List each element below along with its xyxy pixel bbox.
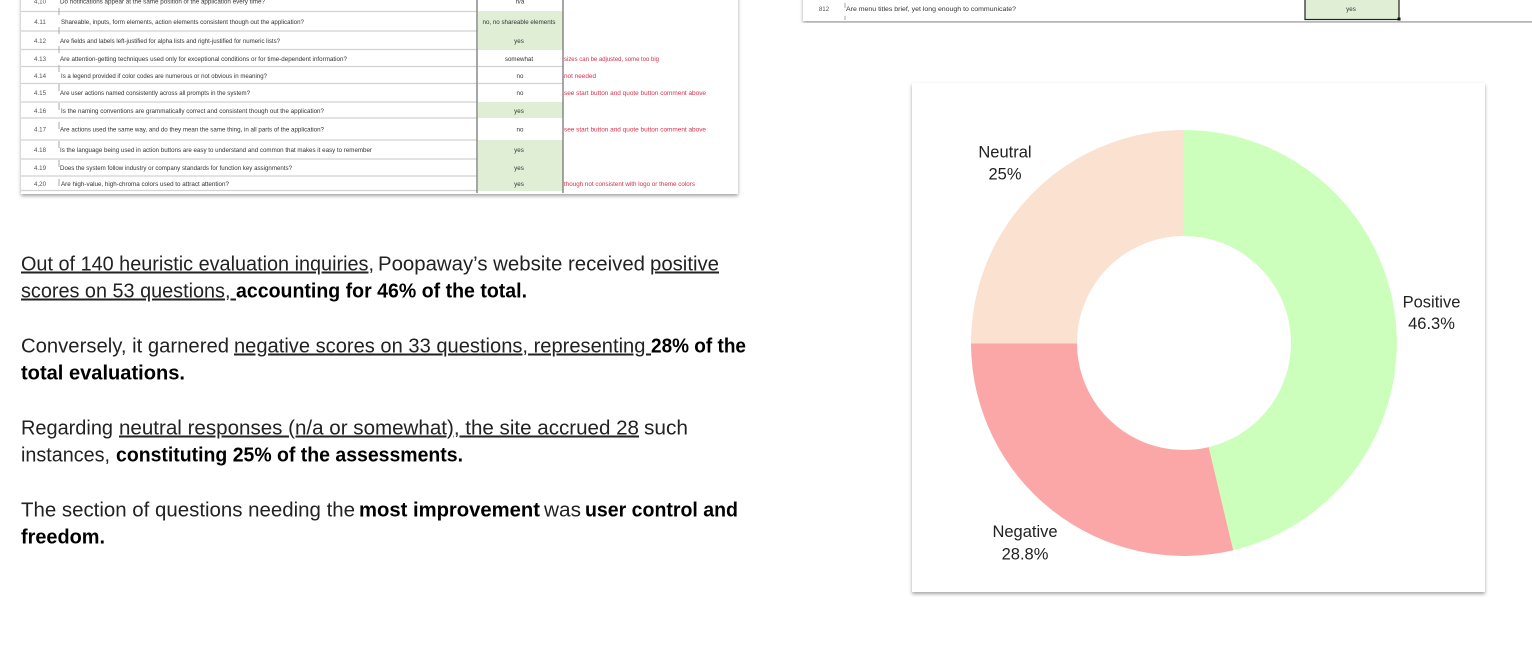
table rows: not needed <box>564 73 597 80</box>
table rows: yes <box>514 181 524 188</box>
label: negative: Negative <box>992 523 1058 541</box>
paragraph: positive scores <box>21 254 719 302</box>
panel: donut chart card <box>912 83 1485 592</box>
table rows: sizes can be adjusted, some too big <box>564 56 660 63</box>
label: positive: Positive <box>1403 294 1460 312</box>
paragraph: neutral responses: constituting 25% of the assessments. <box>116 444 463 466</box>
paragraph: most improvement: most improvement <box>359 500 540 522</box>
table rows: Are user actions named consistently across all prompts in the system? <box>60 90 250 97</box>
table rows: no, no shareable elements <box>483 19 555 26</box>
table rows: Are actions used the same way, and do they mean the same thing, in all parts of the application? <box>60 126 324 134</box>
panel: right evaluation table <box>803 0 1532 21</box>
text block: findings summary <box>21 254 746 548</box>
segment: neutral <box>971 130 1184 344</box>
paragraph: negative scores: 28% of the <box>651 336 746 358</box>
table rows: no <box>517 90 524 97</box>
answer cell <box>1305 0 1399 20</box>
row 8.12: 812 <box>819 6 830 13</box>
table rows: Are attention-getting techniques used only for exceptional conditions or for time-dependent information? <box>60 56 347 63</box>
table answer highlights <box>478 11 563 191</box>
label: positive: 46.3% <box>1408 315 1455 333</box>
paragraph: positive scores: Poopaway’s website received <box>378 254 645 276</box>
paragraph: neutral responses: instances, <box>21 444 110 466</box>
table rows: somewhat <box>505 56 533 63</box>
table rows: see start button and quote button comment above <box>564 90 707 97</box>
paragraph: most improvement: was <box>543 500 581 522</box>
table rows: Are high-value, high-chroma colors used to attract attention? <box>61 181 229 188</box>
row 8.12: Are menu titles brief, yet long enough to communicate? <box>846 6 1016 13</box>
donut chart <box>971 130 1397 556</box>
table column borders <box>477 0 563 193</box>
paragraph: positive scores: positive <box>650 254 719 276</box>
table rows: no <box>517 126 524 134</box>
table rows: yes <box>514 165 524 172</box>
paragraph: neutral responses: such <box>644 418 688 440</box>
table rows: 4.18 <box>34 147 47 154</box>
paragraph: positive scores: scores on 53 questions, <box>21 280 236 302</box>
table rows: yes <box>514 38 524 45</box>
paragraph: neutral responses <box>21 418 688 466</box>
table rows: 4.11 <box>34 19 46 26</box>
paragraph: neutral responses: Regarding <box>21 418 113 440</box>
table rows: yes <box>514 108 524 115</box>
table rows: Are fields and labels left-justified for alpha lists and right-justified for numeric lists? <box>60 38 280 45</box>
segment: negative <box>971 344 1233 556</box>
label: negative: 28.8% <box>1002 546 1049 564</box>
paragraph: neutral responses: neutral responses (n/a or somewhat), the site accrued 28 <box>119 418 639 440</box>
paragraph: most improvement: freedom. <box>21 526 105 548</box>
paragraph: negative scores: negative scores on 33 questions, representing <box>234 336 651 358</box>
table rows <box>34 0 707 188</box>
label: neutral: 25% <box>988 166 1022 184</box>
table rows: yes <box>514 147 524 154</box>
paragraph: most improvement <box>21 500 738 548</box>
paragraph: positive scores: accounting for 46% of the total. <box>236 280 527 302</box>
table rows: 4.16 <box>34 108 47 115</box>
row 8.12: yes <box>1346 6 1356 13</box>
table rows: though not consistent with logo or theme colors <box>564 181 695 188</box>
table rows: Is the naming conventions are grammatically correct and consistent though out the application? <box>61 108 324 115</box>
table rows: 4.17 <box>34 126 47 134</box>
table rows: see start button and quote button comment above <box>564 126 707 134</box>
paragraph: negative scores <box>21 336 746 384</box>
paragraph: negative scores: Conversely, it garnered <box>21 336 229 358</box>
table rows: 4,20 <box>34 181 47 188</box>
table rows: 4.14 <box>34 73 47 80</box>
paragraph: negative scores: total evaluations. <box>21 362 185 384</box>
segment: positive <box>1184 130 1397 550</box>
paragraph: most improvement: The section of questions needing the <box>21 500 355 522</box>
table rows: Is the language being used in action buttons are easy to understand and common that makes it easy to remember <box>60 147 373 154</box>
table rows: 4.15 <box>34 90 47 97</box>
paragraph: most improvement: user control and <box>585 500 738 522</box>
row 8.12 <box>819 6 1356 13</box>
paragraph: positive scores: Out of 140 heuristic evaluation inquiries, <box>21 254 374 276</box>
table rows: no <box>517 73 524 80</box>
table rows: Does the system follow industry or company standards for function key assignments? <box>60 165 292 172</box>
table rows: Is a legend provided if color codes are numerous or not obvious in meaning? <box>61 73 267 80</box>
table rows: Shareable, inputs, form elements, action elements consistent though out the application? <box>61 19 304 26</box>
table grid lines <box>21 8 563 192</box>
label: neutral: Neutral <box>978 144 1032 162</box>
table rows: 4.19 <box>34 165 47 172</box>
panel: left evaluation table <box>21 0 738 194</box>
table rows: 4.12 <box>34 38 47 45</box>
table rows: 4.13 <box>34 56 47 63</box>
